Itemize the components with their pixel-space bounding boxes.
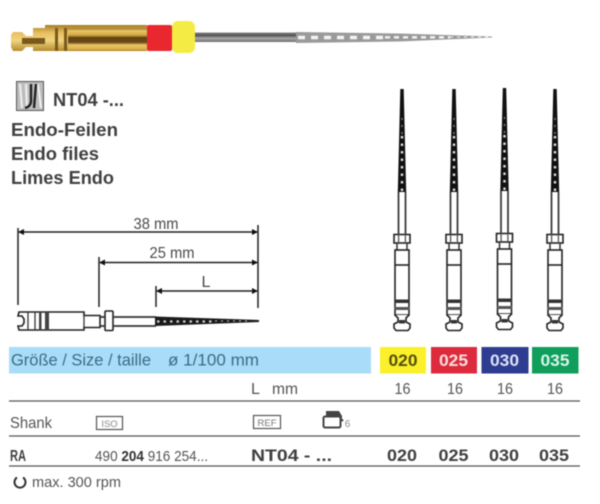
dimension 25 mm [99, 245, 258, 307]
icon: pack of 6: 6 [345, 419, 351, 430]
length row: 16 [447, 381, 463, 398]
product code: NT04 -... [53, 90, 124, 110]
length row: 16 [497, 381, 513, 398]
size header bar [9, 347, 371, 374]
size swatch 030: 030 [490, 352, 519, 370]
file 020 drawing [394, 89, 410, 330]
yellow stopper [172, 21, 195, 53]
size swatch 020: 020 [388, 352, 418, 370]
heading: file names: Endo-Feilen [11, 119, 118, 140]
size header bar: Größe / Size / taille [11, 352, 151, 370]
size swatch 020 [380, 347, 426, 374]
RA row: 025 [438, 446, 468, 465]
size swatch 035: 035 [540, 352, 570, 370]
ISO label: ISO [101, 419, 118, 430]
rotation speed note: max. 300 rpm [32, 475, 121, 491]
dimension 38 mm [18, 216, 258, 308]
photo of endo file [11, 21, 492, 53]
size swatch 030 [482, 347, 528, 374]
RA row: 490 204 916 254... [95, 448, 208, 465]
shank row: Shank [10, 415, 53, 432]
size swatch 025: 025 [439, 352, 468, 370]
RA row: RA [10, 448, 26, 465]
icon: pack of 6 [324, 411, 351, 430]
gold handle [11, 25, 147, 51]
shank row [10, 411, 351, 432]
length row: mm [272, 381, 298, 398]
RA row: 035 [539, 446, 569, 465]
heading: file names: Endo files [11, 143, 99, 164]
dimension 25 mm: 25 mm [150, 245, 194, 262]
RA row: 020 [387, 446, 417, 465]
file 025 drawing [446, 89, 462, 330]
red ring [147, 25, 172, 51]
size header bar: ø 1/100 mm [168, 352, 259, 370]
length row [251, 381, 563, 398]
file 030 drawing [496, 88, 512, 330]
icon: file type logo [16, 82, 44, 110]
twisted tip [296, 32, 492, 43]
heading: file names: Limes Endo [11, 167, 114, 188]
RA row: 030 [489, 446, 519, 465]
dimension diagram [18, 216, 259, 330]
dimension 38 mm: 38 mm [134, 216, 178, 233]
icon: rotation [15, 478, 26, 488]
steel shaft [195, 32, 298, 42]
dimension L [156, 274, 258, 307]
horizontal file drawing [18, 311, 259, 330]
size swatch 035 [532, 347, 578, 374]
dimension L: L [202, 274, 211, 291]
size swatch 025 [431, 347, 477, 374]
length row: 16 [394, 381, 411, 398]
REF label: REF [258, 418, 277, 429]
file 035 drawing [547, 89, 563, 330]
length row: L [251, 381, 260, 398]
REF label [254, 416, 280, 429]
heading: file names [11, 119, 118, 188]
RA row: NT04 - ... [251, 446, 332, 465]
RA row [10, 446, 569, 465]
length row: 16 [547, 381, 563, 398]
ISO label [96, 416, 122, 430]
